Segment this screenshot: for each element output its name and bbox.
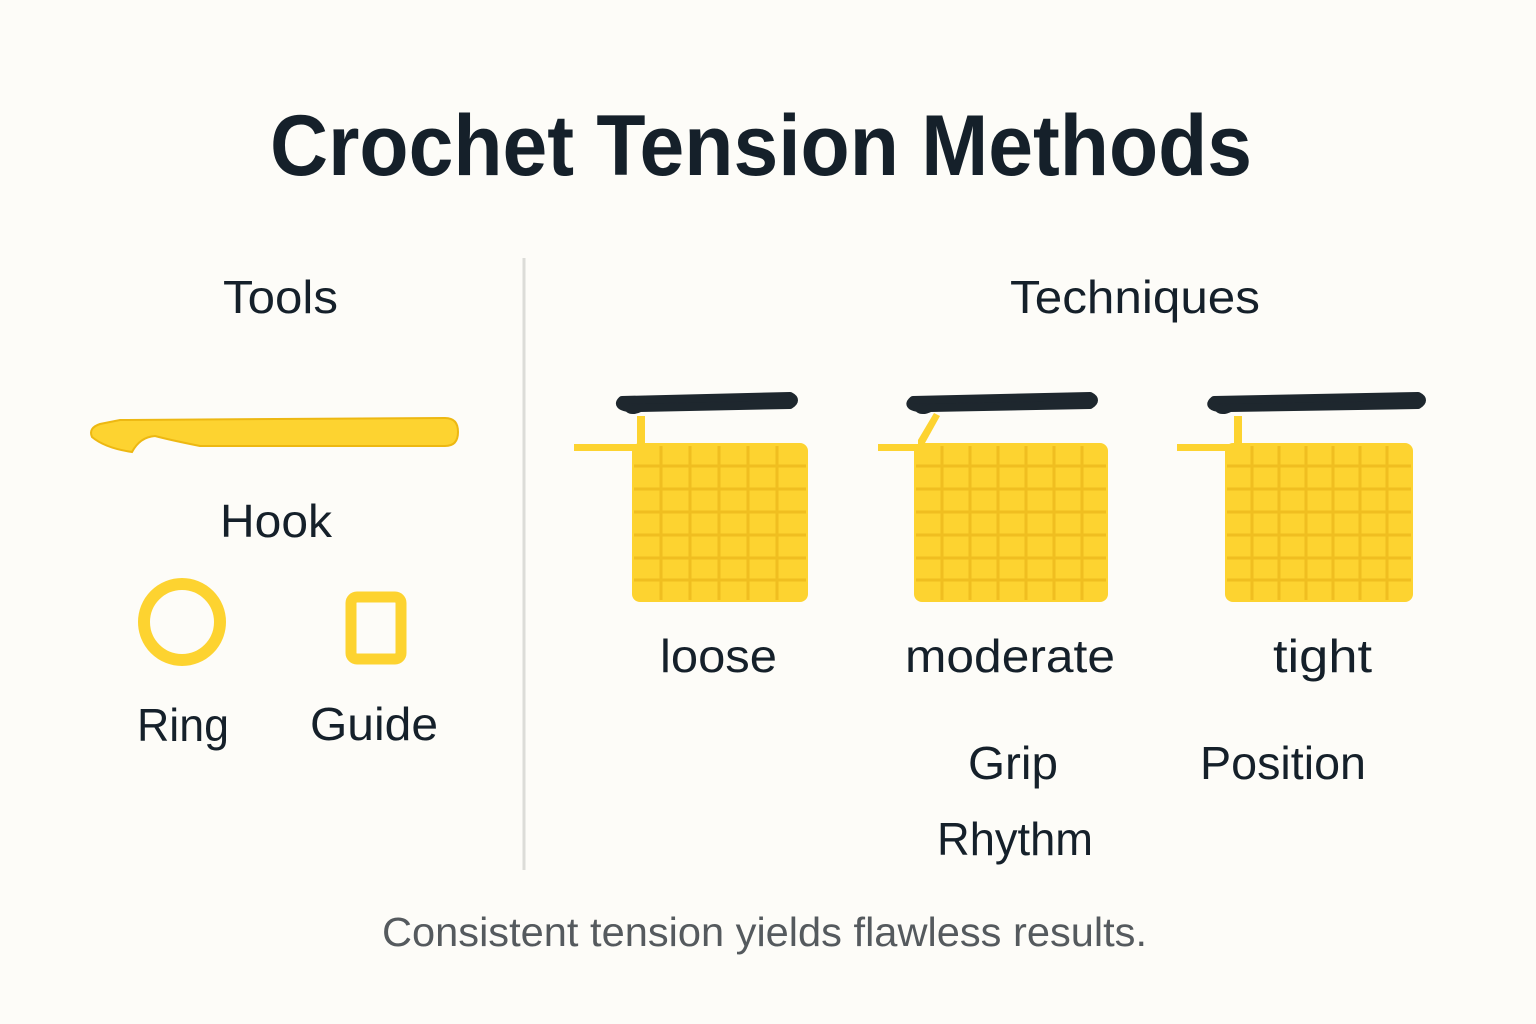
panel: techniques bbox=[574, 271, 1422, 865]
swatch: loose bbox=[574, 396, 808, 602]
title: Crochet Tension Methods bbox=[270, 98, 1252, 194]
swatch: moderate bbox=[878, 396, 1108, 602]
panel: tools bbox=[91, 271, 458, 751]
label: tight: tight bbox=[1273, 630, 1372, 682]
icon: ring bbox=[144, 584, 220, 660]
label: Hook: Hook bbox=[220, 495, 333, 547]
heading: Tools: Tools bbox=[223, 271, 338, 323]
footer caption: Consistent tension yields flawless results. bbox=[382, 909, 1147, 955]
label: Grip: Grip bbox=[968, 737, 1058, 789]
swatch: tight bbox=[1177, 396, 1422, 602]
icon: hook bbox=[91, 418, 458, 452]
divider bbox=[522, 258, 526, 870]
label: Position: Position bbox=[1200, 737, 1366, 789]
heading: Techniques: Techniques bbox=[1010, 271, 1260, 323]
label: loose: loose bbox=[660, 630, 777, 682]
label: Guide: Guide bbox=[310, 698, 438, 750]
label: Ring: Ring bbox=[137, 699, 229, 751]
icon: guide bbox=[351, 597, 401, 659]
label: Rhythm: Rhythm bbox=[937, 813, 1093, 865]
label: moderate: moderate bbox=[905, 630, 1115, 682]
